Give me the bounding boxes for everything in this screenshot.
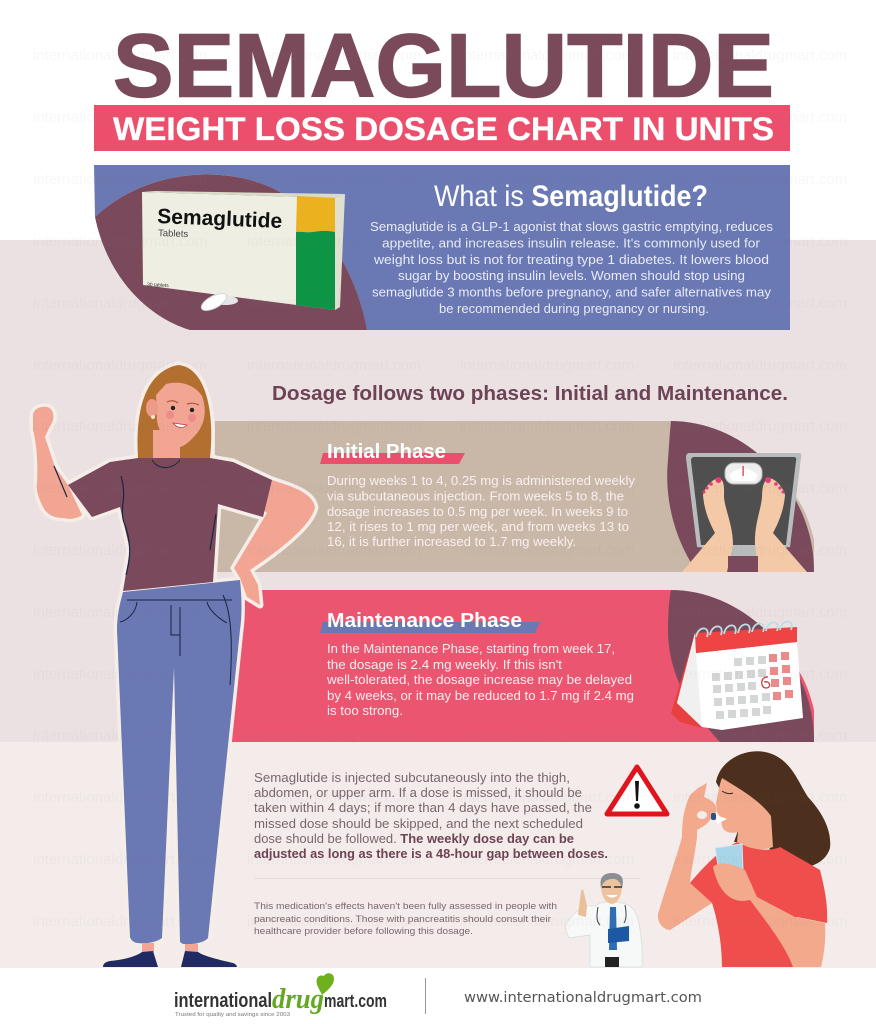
watermark: internationaldrugmart.com [673,727,847,744]
watermark: internationaldrugmart.com [673,171,847,188]
description: sugar by boosting insulin levels. Women should stop using [398,268,745,283]
logo: Trusted for quality and savings since 2003 [175,1012,290,1018]
icon: medicine box [142,191,345,314]
body text: 16, it is further increased to 1.7 mg weekly. [327,535,576,549]
note text: pancreatic conditions. Those with pancreatitis should consult their [254,913,551,924]
watermark: internationaldrugmart.com [673,47,847,64]
water glass [715,844,743,870]
description [370,219,773,316]
body text: via subcutaneous injection. From weeks 5 to 8, the [327,490,624,504]
description: Semaglutide is a GLP-1 agonist that slows gastric emptying, reduces [370,219,773,234]
watermark: internationaldrugmart.com [247,418,421,435]
body text: 12, it rises to 1 mg per week, and from weeks 13 to [327,520,629,534]
phase label: Initial Phase [327,441,446,463]
watermark: internationaldrugmart.com [247,480,421,497]
icon: warning triangle [607,767,667,814]
watermark: internationaldrugmart.com [33,480,207,497]
divider [254,878,640,879]
subtitle banner: WEIGHT LOSS DOSAGE CHART IN UNITS [113,111,774,147]
watermark: internationaldrugmart.com [460,418,634,435]
watermark: internationaldrugmart.com [673,666,847,683]
illustration: doctor [565,873,642,967]
watermark: internationaldrugmart.com [247,109,421,126]
body text: is too strong. [327,704,403,718]
neck and face [716,778,773,849]
figure outline [33,365,315,967]
phase label: Maintenance Phase [327,610,522,632]
illustration: woman showing weight loss [33,365,315,967]
panel: maintenance phase [225,590,814,742]
facial features [151,401,199,428]
panel: initial phase [215,421,814,572]
watermark: internationaldrugmart.com [33,666,207,683]
heading: What is Semaglutide? [434,180,708,213]
illustration: woman taking a pill [658,751,830,967]
watermark: internationaldrugmart.com [460,357,634,374]
watermark: internationaldrugmart.com [247,171,421,188]
closed eye [722,791,733,794]
warning and administration text: missed dose should be skipped, and the next scheduled [254,816,583,831]
body text: dosage increases to 0.5 mg per week. In weeks 9 to [327,505,628,519]
panel blob [95,175,367,330]
watermark: internationaldrugmart.com [247,727,421,744]
watermark: internationaldrugmart.com [247,604,421,621]
watermark: internationaldrugmart.com [33,109,207,126]
right foot [755,478,807,572]
watermark: internationaldrugmart.com [247,357,421,374]
shirt [68,458,272,591]
note text: healthcare provider before following this dosage. [254,925,473,936]
phases heading: Dosage follows two phases: Initial and Maintenance. [272,383,788,405]
hair [137,365,211,458]
left foot [682,478,733,572]
watermark: internationaldrugmart.com [673,480,847,497]
watermark: internationaldrugmart.com [460,666,634,683]
logo [174,973,387,1018]
raised arm [33,407,82,519]
shoes [103,951,158,967]
watermark: internationaldrugmart.com [460,851,634,868]
watermark: internationaldrugmart.com [460,727,634,744]
icon: medicine box: Tablets [158,228,189,240]
warning and administration text: dose should be followed. The weekly dose day can be [254,831,574,846]
panel: what is semaglutide [94,165,790,330]
logo: international [174,990,272,1012]
description: weight loss but is not for treating type 1 diabetes. It lowers blood [373,252,769,267]
logo: drug [272,983,324,1015]
watermark: internationaldrugmart.com [460,109,634,126]
warning and administration text: abdomen, or upper arm. If a dose is missed, it should be [254,785,582,800]
watermark: internationaldrugmart.com [460,233,634,250]
warning and administration text: Semaglutide is injected subcutaneously into the thigh, [254,770,570,785]
watermark: internationaldrugmart.com [460,47,634,64]
watermark: internationaldrugmart.com [673,851,847,868]
watermark: internationaldrugmart.com [673,542,847,559]
description: be recommended during pregnancy or nursing. [439,301,709,316]
website url: www.internationaldrugmart.com [464,990,702,1006]
hair [716,751,830,868]
watermark: internationaldrugmart.com [460,542,634,559]
watermark: internationaldrugmart.com [247,542,421,559]
watermark: internationaldrugmart.com [673,604,847,621]
watermark: internationaldrugmart.com [33,789,207,806]
watermark: internationaldrugmart.com [673,418,847,435]
watermark: internationaldrugmart.com [33,295,207,312]
warning and administration text [254,770,608,861]
watermark: internationaldrugmart.com [247,295,421,312]
icon: medicine box: Semaglutide [157,205,283,233]
body text: In the Maintenance Phase, starting from week 17, [327,642,615,656]
title: SEMAGLUTIDE [113,16,774,116]
body text [326,642,634,718]
watermark: internationaldrugmart.com [460,604,634,621]
body text: During weeks 1 to 4, 0.25 mg is administered weekly [327,474,636,488]
watermark: internationaldrugmart.com [460,913,634,930]
watermark: internationaldrugmart.com [247,233,421,250]
watermark: internationaldrugmart.com [460,789,634,806]
watermark: internationaldrugmart.com [247,666,421,683]
watermark: internationaldrugmart.com [33,604,207,621]
watermark: internationaldrugmart.com [673,295,847,312]
watermark: internationaldrugmart.com [33,171,207,188]
jeans [117,580,242,944]
watermark: internationaldrugmart.com [673,789,847,806]
watermark: internationaldrugmart.com [33,542,207,559]
watermark: internationaldrugmart.com [33,357,207,374]
body text [327,474,636,549]
ear [146,399,158,417]
watermark: internationaldrugmart.com [460,171,634,188]
watermark: internationaldrugmart.com [673,233,847,250]
panel blob [667,421,814,572]
other arm with hand [713,864,825,967]
description: appetite, and increases insulin release. It's commonly used for [382,236,761,250]
body text: the dosage is 2.4 mg weekly. If this isn't [327,658,563,672]
neck and face [153,430,180,462]
watermark: internationaldrugmart.com [247,851,421,868]
warning and administration text: adjusted as long as there is a 48-hour gap between doses. [254,846,608,861]
watermark: internationaldrugmart.com [460,480,634,497]
icon: medicine box: 30 tablets [147,282,169,289]
panel blob [668,590,814,742]
watermark: internationaldrugmart.com [673,109,847,126]
right arm on hip [234,480,315,605]
shirt [690,842,827,967]
note text [254,900,557,936]
description: semaglutide 3 months before pregnancy, and safer alternatives may [372,284,772,300]
watermark: internationaldrugmart.com [33,851,207,868]
logo: mart.com [324,991,387,1011]
icon: calendar [671,621,803,730]
watermark: internationaldrugmart.com [33,233,207,250]
note text: This medication's effects haven't been fully assessed in people with [254,900,557,911]
watermark: internationaldrugmart.com [33,727,207,744]
watermark: internationaldrugmart.com [247,47,421,64]
pill [711,813,716,820]
watermark: internationaldrugmart.com [247,789,421,806]
watermark: internationaldrugmart.com [673,913,847,930]
watermark: internationaldrugmart.com [460,295,634,312]
warning and administration text: taken within 4 days; if more than 4 days have passed, the [254,800,592,815]
watermark: internationaldrugmart.com [33,913,207,930]
ankles [142,943,198,952]
body text: well-tolerated, the dosage increase may be delayed [326,673,632,687]
watermark: internationaldrugmart.com [33,47,207,64]
body text: by 4 weeks, or it may be reduced to 1.7 mg if 2.4 mg [327,689,634,703]
footer [0,968,876,1024]
raised arm [658,783,716,930]
watermark: internationaldrugmart.com [33,418,207,435]
watermark: internationaldrugmart.com [247,913,421,930]
icon: bathroom scale with feet [682,453,807,572]
watermark: internationaldrugmart.com [673,357,847,374]
